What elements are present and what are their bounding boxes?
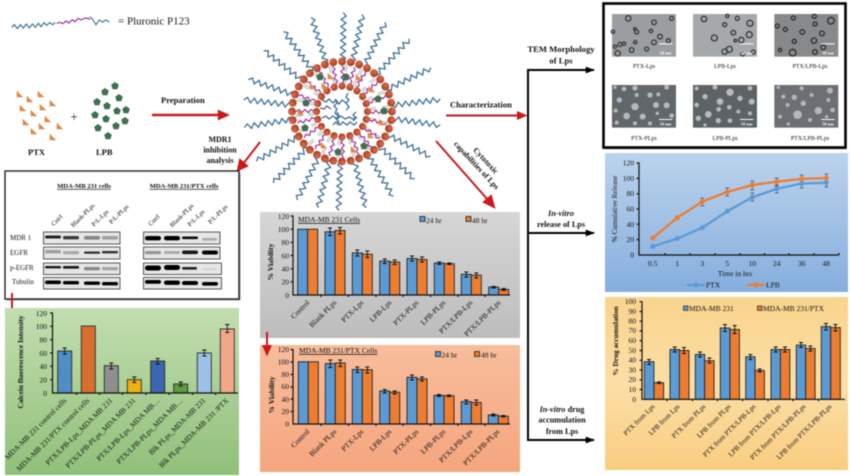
label: MDR1 inhibition analysis: inhibition (203, 146, 237, 154)
legend: 48 hr (472, 216, 488, 225)
x labels: MDA-MB 231/PTX control cells (14, 396, 91, 473)
24 hr bars (298, 362, 498, 424)
TEM captions: LPB-PLps (712, 136, 738, 142)
y ticks: 120 (623, 158, 634, 168)
axes (50, 313, 238, 395)
lane labels (50, 202, 230, 229)
legend: MDA-MB 231 (689, 304, 734, 313)
lane labels: P/L-Lps (91, 208, 111, 228)
encapsulated drugs (298, 73, 388, 155)
arrow: cytotoxic (436, 141, 494, 207)
y ticks: 0 (632, 395, 636, 404)
x labels: LPB from PTX/LPB-PLps (775, 403, 834, 461)
outer phospholipid heads (288, 58, 396, 165)
lane labels: Blank-PLps (70, 202, 97, 229)
label: Preparation: Preparation (161, 95, 205, 105)
x labels: PTX from PLps (670, 403, 708, 440)
y ticks: 100 (278, 225, 289, 234)
lane labels: Cntrl (50, 213, 65, 228)
row labels: Tubulin (12, 278, 34, 286)
x labels (289, 298, 502, 338)
error bars (328, 228, 506, 290)
TEM image: PTX/LPB-Lps (774, 14, 838, 57)
panel: in-vitro release chart (605, 153, 848, 292)
TEM captions: PTX/LPB-Lps (792, 64, 828, 70)
inner core chains (320, 93, 357, 125)
x labels: PTX/LPB-PLps_MDA MB… (115, 396, 184, 466)
x labels: LPB-PLps (419, 427, 447, 456)
48 hr bars (308, 229, 509, 295)
y ticks: 100 (278, 358, 289, 366)
arrow tree: results connectors (528, 67, 594, 443)
y ticks (278, 212, 289, 300)
y ticks: 100 (625, 297, 636, 306)
legend: 24 hr (426, 216, 442, 225)
y ticks: 10 (628, 385, 636, 394)
y axis title: % Viability (266, 243, 275, 280)
x ticks: 0.5 (648, 259, 658, 268)
y ticks: 120 (278, 345, 289, 354)
TEM image: PTX-Lps: 50 nm (660, 50, 672, 55)
y ticks: 40 (40, 362, 47, 371)
y ticks: 60 (628, 336, 636, 345)
TEM image: PTX/LPB-PLps (774, 85, 838, 128)
legend: PTX (706, 280, 721, 290)
x labels: PTX from PTX/LPB-Lps (701, 403, 758, 459)
label: Cytotoxic capabilities of Lps: capabilities of Lps (452, 140, 501, 191)
error bars (700, 174, 828, 206)
row labels: MDR 1 (10, 234, 32, 242)
x ticks: 1 (675, 259, 679, 268)
y ticks: 40 (626, 220, 634, 229)
y ticks (278, 345, 289, 428)
y axis title: % Drug accumulation (611, 306, 620, 376)
label: In-vitro release of Lps: In-vitro (547, 209, 574, 218)
x axis title: Time in hrs (718, 269, 752, 278)
x labels: LPB-Lps (368, 298, 393, 324)
panel: TEM morphology (604, 4, 846, 150)
panel: calcein fluorescence chart (3, 308, 239, 475)
TEM image: LPB-Lps (693, 14, 757, 57)
lane labels: P/L-PLps (108, 203, 131, 226)
legend (687, 280, 780, 290)
x labels: PTX/LPB-PLps (461, 427, 501, 467)
error bars (328, 360, 505, 417)
y ticks: 60 (282, 252, 289, 260)
24 hr bars (298, 229, 499, 295)
icon: polymer chain (12, 17, 109, 29)
MDA-MB 231/PTX bars (654, 328, 840, 399)
x ticks: 48 (823, 259, 830, 268)
y ticks: 30 (628, 366, 636, 374)
legend: MDA-MB 231/PTX (763, 304, 825, 313)
lane labels: P/L-PLps (207, 203, 230, 226)
heading: MDA-MB 231 cells: MDA-MB 231 cells (57, 183, 111, 190)
icon: PTX triangles (17, 91, 63, 140)
x ticks: 36 (798, 259, 806, 268)
y ticks: 100 (36, 322, 47, 331)
label: In-vitro drug accumulation from Lps: accumulation (538, 416, 586, 424)
arrow: blot to calcein (8, 293, 16, 319)
lipid bilayer tails (295, 65, 389, 158)
MDA-MB 231 bars (644, 327, 831, 399)
x labels (3, 396, 231, 473)
x ticks: 5 (725, 259, 729, 268)
plus sign: + (70, 109, 78, 124)
x labels: PTX-Lps (339, 427, 365, 453)
x labels: Blank PLps (307, 427, 338, 458)
lane labels: Cntrl (147, 213, 162, 228)
axes (290, 216, 510, 297)
legend (420, 216, 488, 225)
y ticks: 20 (282, 278, 289, 286)
legend: LPB (766, 280, 780, 290)
arrow: gray to salmon chart (264, 332, 270, 354)
row labels (10, 234, 34, 286)
TEM image: PTX-Lps (611, 14, 676, 57)
y ticks (623, 158, 634, 260)
x labels: LPB from Lps (647, 403, 682, 437)
label: In-vitro release of Lps: release of Lps (537, 220, 585, 229)
axes (640, 302, 845, 401)
x labels: LPB from PTX/LPB-Lps (727, 403, 783, 458)
legend: Pluronic P123 (12, 16, 190, 29)
y axis title: % Cumulative Release (610, 176, 619, 242)
axes (290, 350, 510, 426)
48 hr bars (308, 362, 508, 424)
arrow: MDR1 (238, 142, 260, 170)
y ticks (625, 297, 636, 404)
x labels: PTX from PTX/LPB-PLps (749, 403, 808, 461)
lane labels: Blank-PLps (169, 202, 196, 229)
chart title: MDA-MB 231 Cells (298, 215, 360, 224)
label: MDR1 inhibition analysis: analysis (206, 156, 234, 165)
heading: MDA-MB 231/PTX cells: MDA-MB 231/PTX cells (150, 183, 219, 190)
panel: viability chart MDA-MB 231/PTX (260, 345, 520, 472)
TEM captions (631, 64, 830, 142)
TEM image: LPB-Lps: 50 nm (741, 50, 753, 55)
x labels: MDA-MB 231 control cells (3, 396, 68, 461)
y ticks: 80 (626, 189, 634, 198)
inner phospholipid heads (313, 82, 371, 141)
legend: 24 hr (442, 350, 458, 360)
y ticks (36, 309, 47, 398)
label: Cytotoxic capabilities of Lps: Cytotoxic (471, 146, 501, 176)
x labels: Control (289, 298, 311, 321)
arrow: characterization (446, 112, 525, 118)
x labels: PTX/LPB-Lps_MDA MB 231 (44, 396, 115, 467)
legend: 48 hr (481, 350, 497, 360)
x labels: LPB from PLps (695, 403, 733, 440)
y ticks: 40 (282, 264, 289, 274)
x labels: PTX/LPB-PLps_MDA MB 231 (64, 396, 138, 470)
x labels (622, 403, 834, 461)
panel: western blot (5, 171, 240, 300)
y ticks: 60 (282, 382, 289, 391)
row labels: EGFR (10, 249, 28, 257)
panel: drug accumulation chart (605, 297, 848, 470)
TEM image: LPB-PLps: 50 nm (741, 121, 753, 126)
y ticks: 20 (40, 376, 47, 384)
y ticks: 60 (626, 204, 634, 214)
TEM captions: PTX-PLps (631, 136, 657, 142)
error bars (63, 324, 229, 386)
blot bands (45, 236, 218, 286)
series: LPB (650, 176, 829, 241)
label: Characterization: Characterization (450, 100, 512, 110)
x ticks: 10 (749, 259, 756, 268)
y ticks: 70 (628, 326, 636, 335)
y axis title: Calcein fluorescence Intensity (16, 315, 25, 409)
y ticks: 80 (282, 370, 289, 379)
TEM captions: PTX/LPB-PLps (791, 136, 830, 142)
blot frames (44, 232, 222, 289)
x labels: Blank PLps (307, 298, 338, 329)
y ticks: 120 (36, 309, 47, 318)
x labels: PTX/LPB-Lps (437, 427, 474, 464)
x labels: PTX-PLps (391, 298, 420, 327)
x labels: PTX/LPB-PLps (462, 298, 502, 338)
label: In-vitro drug accumulation from Lps: from Lps (546, 427, 578, 436)
y ticks: 80 (40, 336, 47, 344)
x labels: PTX-Lps (339, 298, 365, 324)
TEM captions: PTX-Lps (633, 64, 656, 70)
y ticks: 0 (285, 291, 289, 300)
TEM image: PTX-PLps: 50 nm (660, 121, 672, 126)
x labels: Blk PLps_MDA-MB 231 /PTX (157, 396, 231, 469)
y ticks: 100 (623, 174, 634, 183)
legend (684, 304, 825, 313)
axes (636, 163, 839, 255)
y ticks: 0 (43, 389, 47, 398)
label: In-vitro drug accumulation from Lps: In-vitro drug (540, 405, 584, 414)
x labels (289, 427, 501, 467)
panel: viability chart MDA-MB 231 (260, 212, 520, 338)
series: PTX (650, 180, 829, 249)
y ticks: 50 (628, 346, 636, 355)
label: TEM Morphology of Lps: of Lps (549, 56, 573, 66)
y ticks: 120 (278, 212, 289, 221)
y ticks: 80 (628, 316, 636, 326)
y ticks: 40 (282, 395, 289, 404)
TEM image: PTX/LPB-Lps: 50 nm (822, 50, 834, 55)
y ticks: 90 (628, 307, 636, 316)
y ticks: 0 (630, 250, 634, 260)
x ticks: 24 (773, 259, 781, 268)
bars (58, 326, 234, 393)
TEM image: LPB-PLps (693, 85, 757, 128)
y ticks: 80 (282, 238, 289, 247)
TEM image: PTX/LPB-PLps: 50 nm (822, 121, 834, 126)
error bars (647, 324, 838, 384)
arrow: preparation (152, 112, 227, 118)
x labels: PTX from Lps (622, 403, 657, 437)
y ticks: 40 (628, 356, 636, 364)
y ticks: 0 (285, 420, 289, 428)
x labels: PTX/LPB-Lps (437, 298, 474, 335)
TEM image: PTX-PLps (612, 85, 676, 128)
x ticks (648, 259, 830, 268)
label: PTX: PTX (28, 147, 46, 157)
y ticks: 20 (282, 407, 289, 416)
label: MDR1 inhibition analysis: MDR1 (208, 135, 232, 144)
x labels: Blk PLps_MDA-MB 231 (147, 396, 208, 457)
y ticks: 60 (40, 349, 47, 358)
y ticks: 20 (626, 235, 634, 244)
label: LPB: LPB (96, 147, 113, 157)
y ticks: 20 (628, 375, 636, 384)
label: TEM Morphology of Lps: TEM Morphology (527, 44, 595, 54)
liposome diagram (243, 12, 441, 211)
icon: LPB pentagons (91, 82, 130, 139)
label: Pluronic P123: = Pluronic P123 (118, 16, 190, 28)
row labels: p-EGFR (10, 264, 34, 272)
y axis title: % Viability (267, 376, 276, 413)
legend (436, 350, 497, 360)
outer PEG chains (243, 12, 441, 211)
x labels: LPB-PLps (419, 298, 447, 327)
x labels: PTX/LPB-Lps_MDA MB… (94, 396, 161, 463)
x ticks: 3 (700, 259, 704, 268)
chart title: MDA-MB 231/PTX Cells (299, 346, 377, 355)
x labels: PTX-PLps (391, 427, 420, 456)
TEM captions: LPB-Lps (714, 64, 737, 70)
x labels: Control (289, 427, 311, 450)
x labels: LPB-Lps (368, 427, 393, 453)
lane labels: P/L-Lps (187, 208, 207, 228)
